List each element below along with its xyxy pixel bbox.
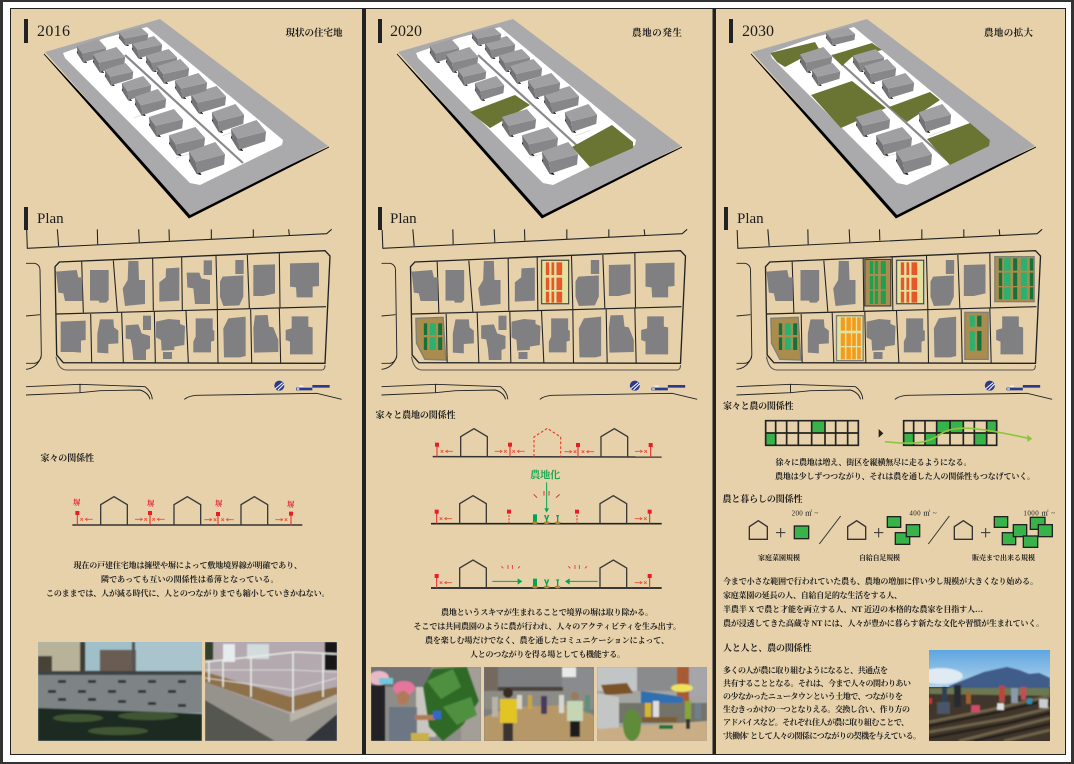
- photo: people on sandy plot: [484, 667, 594, 741]
- 3D model: 2020: [397, 19, 682, 218]
- Plan heading: Plan: [737, 211, 764, 227]
- photo: children with plant: [371, 667, 481, 741]
- text block: description 2020: 農地というスキマが生まれることで境界の塀は取り除かる。: [441, 607, 653, 617]
- Plan heading: Plan: [37, 211, 64, 227]
- text block: community: [723, 665, 921, 740]
- text block: growing scale: 農が浸透してきた高蔵寺 NT には、人々が豊かに暮らす新たな文化や習慣が生まれていく。: [723, 618, 1044, 628]
- diagram row: people move toward farmland: [431, 560, 662, 588]
- diagram: houses separated by walls: [72, 497, 302, 526]
- text block: fields connect: 農地は少しずつつながり、それは農を通した人の関係性もつなげていく。: [775, 471, 1035, 481]
- plot: lot 4: [865, 259, 891, 306]
- text block: community: 生むきっかけの一つとなりえる。交換し合い、作り方の: [723, 704, 910, 714]
- photo: concrete block wall: [38, 642, 202, 741]
- diagram row: walls removed: [431, 482, 662, 524]
- Plan heading: [724, 207, 764, 230]
- text block: fields connect: [775, 457, 1035, 481]
- panel: 2030: [716, 9, 1065, 754]
- scale: home garden: [749, 509, 990, 544]
- panel: 2016: [11, 9, 362, 754]
- text block: growing scale: [723, 576, 1044, 628]
- 3D model: 2030: [751, 19, 1036, 218]
- 2030 heading: 2030: [742, 23, 774, 40]
- scale: commercial: 1000 ㎡ ~: [1023, 509, 1055, 518]
- 2016 heading: [24, 19, 70, 43]
- text block: description 2020: 農を楽しむ場だけでなく、農を通したコミュニケーションによって、: [425, 635, 669, 645]
- 2020 heading: [378, 19, 422, 43]
- Plan heading: Plan: [390, 211, 417, 227]
- text block: description 2016: このままでは、人が減る時代に、人とのつながりまでも縮小していきかねない。: [46, 588, 330, 598]
- 2020 heading: 2020: [390, 23, 422, 40]
- text block: description 2020: そこでは共同農園のように農が行われ、人々のアクティビティを生み出す。: [414, 621, 681, 631]
- text block: community: アドバイスなど。それぞれ住人が農に取り組むことで、: [723, 717, 909, 727]
- 2016 heading: 2016: [37, 23, 70, 40]
- text block: fields connect: 徐々に農地は増え、街区を縦横無尽に走るようになる。: [776, 457, 972, 467]
- site plan: 2016: [26, 229, 342, 399]
- photo: gathering at the farm: [597, 667, 707, 741]
- scale labels: 販売まで出来る規模: [972, 553, 1035, 562]
- Plan heading: [24, 207, 64, 230]
- text block: description 2016: 現在の戸建住宅地は擁壁や塀によって敷地境界線が明確であり、: [74, 560, 302, 570]
- heading: farming and living: 農と暮らしの関係性: [722, 493, 802, 504]
- text block: growing scale: 家庭菜園の延長の人、自給自足的な生活をする人、: [723, 590, 902, 600]
- subtitle: farmland expansion: 農地の拡大: [984, 27, 1033, 39]
- text block: description 2020: 人とのつながりを得る場としても機能する。: [470, 649, 625, 659]
- text block: description 2020: [414, 607, 681, 659]
- label: farmland conversion: 農地化: [530, 469, 560, 482]
- scale: commercial: [954, 509, 1055, 547]
- scale: self-sufficient: 400 ㎡ ~: [909, 509, 937, 518]
- scale: self-sufficient: [848, 509, 949, 544]
- text block: community: 多くの人が農に取り組むようになると、共通点を: [723, 665, 888, 675]
- diagram: houses separated by walls: 塀: [73, 498, 81, 507]
- plot: lot 8: [995, 257, 1034, 302]
- scale labels: [758, 553, 1035, 562]
- site plan: 2020: [381, 229, 697, 399]
- text block: community: '共働体' として人々の関係につながりの契機を与えている。: [723, 730, 921, 740]
- scale: home garden: 200 ㎡ ~: [792, 509, 819, 518]
- 2030 heading: [729, 19, 774, 43]
- Plan heading: [378, 207, 417, 230]
- diagrams: grid and farm scale: [749, 421, 1055, 547]
- subtitle: farmland emerges: 農地の発生: [632, 27, 682, 39]
- grid: scattered farmland: [766, 421, 858, 445]
- diagram: houses separated by walls: 塀: [287, 500, 295, 509]
- text block: growing scale: 今まで小さな範囲で行われていた農も、農地の増加に伴い少し規模が大きくなり始める。: [723, 576, 1038, 586]
- subtitle: current residential area: 現状の住宅地: [286, 27, 343, 39]
- panel: 2020: [366, 9, 712, 754]
- heading: relation between houses: 家々の関係性: [40, 452, 94, 463]
- diagram: houses separated by walls: 塀: [147, 499, 155, 508]
- 3D model: 2016: [44, 19, 329, 218]
- scale labels: 家庭菜園規模: [758, 553, 800, 562]
- text block: community: の少なかったニュータウンという土地で、つながりを: [723, 691, 903, 701]
- plot: lot 15: [965, 312, 988, 359]
- heading: relation of houses and farming: 家々と農の関係性: [723, 400, 794, 411]
- arrow: progression: [879, 429, 883, 438]
- plot: lot 11: [836, 316, 863, 361]
- heading: people and farming: 人と人と、農の関係性: [723, 642, 812, 653]
- diagram: farmland appears between houses: [431, 428, 662, 588]
- text block: community: 共有することとなる。それは、今まで人々の関わりあい: [723, 678, 911, 688]
- photo: fence on retaining wall: [205, 642, 337, 741]
- photo: people in field with mountain: [929, 650, 1050, 741]
- text block: growing scale: 半農半 X で農と才能を両立する人、NT 近辺の本格的な農家を目指す人…: [723, 604, 983, 614]
- heading: relation of houses and farmland: 家々と農地の関係性: [376, 409, 456, 420]
- grid: connected farmland: [885, 421, 1032, 445]
- site plan: 2030: [736, 229, 1052, 399]
- diagram row: vacant lot: [433, 428, 662, 457]
- scale labels: 自給自足規模: [859, 553, 900, 562]
- text block: description 2016: [46, 560, 330, 598]
- text block: description 2016: 隣であっても互いの関係性は希薄となっている。: [101, 574, 278, 584]
- diagram: houses separated by walls: 塀: [215, 499, 223, 508]
